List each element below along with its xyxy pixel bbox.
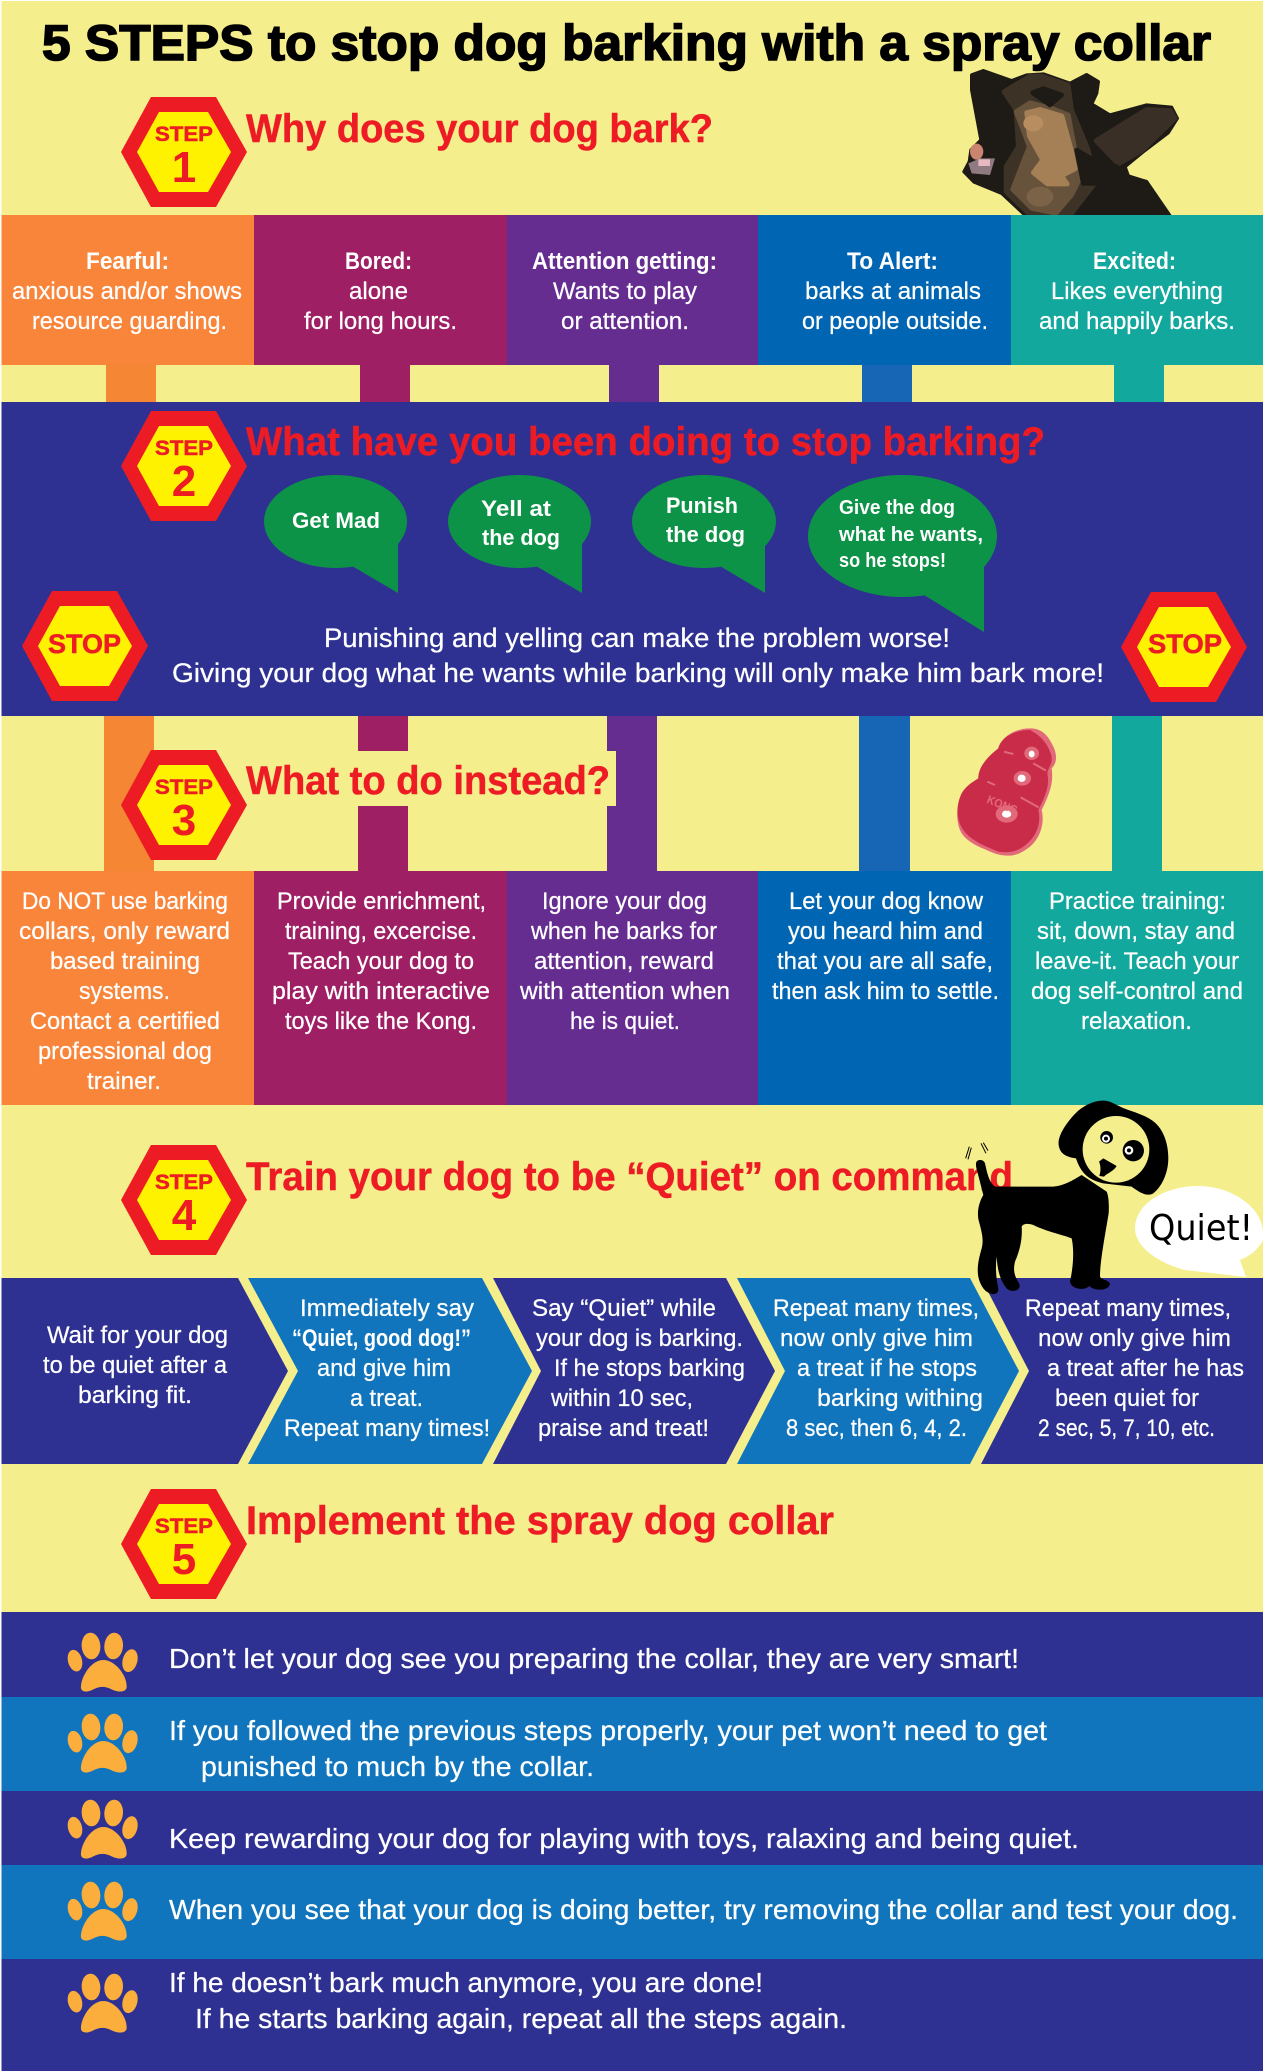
step 3 badge	[121, 750, 247, 860]
chevron 1: barking fit.	[78, 1382, 192, 1409]
speech bubble: get mad: Get Mad	[292, 508, 380, 533]
panel: attention getting	[507, 215, 758, 365]
step 4 badge: STEP	[155, 1171, 213, 1194]
title: 5 STEPS to stop dog barking with a spray collar	[42, 15, 1211, 71]
panel: do not use barking collars: Do NOT use barking	[22, 888, 228, 915]
stop sign left	[22, 591, 148, 701]
chevron 3: within 10 sec,	[550, 1385, 693, 1412]
panel: do not use barking collars: professional dog	[38, 1038, 212, 1065]
step 3 badge: STEP	[155, 776, 213, 799]
chevron 2: Immediately say	[300, 1295, 474, 1322]
panel: do not use barking collars: systems.	[79, 978, 170, 1005]
speech bubble: give the dog what he wants	[808, 475, 997, 632]
panel: bored	[254, 215, 507, 365]
stop sign left: STOP	[48, 629, 121, 659]
tip row 4: When you see that your dog is doing better, try removing the collar and test your dog.	[169, 1894, 1238, 1925]
panel: ignore your dog: attention, reward	[534, 948, 714, 975]
panel: bored: alone	[349, 278, 408, 305]
panel: excited: Excited:	[1093, 248, 1176, 275]
section: step 2 what have you been doing	[2, 402, 1263, 716]
panel: let your dog know: Let your dog know	[789, 888, 984, 915]
step 2 badge: 2	[172, 457, 196, 506]
chevron 5	[981, 1278, 1263, 1464]
step 1 badge: STEP	[155, 123, 213, 146]
speech bubble: yell at the dog: Yell at	[481, 496, 552, 521]
icon: cartoon dog	[966, 1101, 1168, 1294]
panel: fearful	[2, 215, 254, 365]
panel: provide enrichment: Provide enrichment,	[277, 888, 486, 915]
heading backing	[246, 751, 616, 806]
chevron 4: a treat if he stops	[797, 1355, 977, 1382]
panel: attention getting: or attention.	[561, 308, 689, 335]
section: what to do instead columns	[2, 871, 1263, 1105]
stop sign right	[1121, 592, 1247, 702]
step 2 heading: What have you been doing to stop barking?	[246, 420, 1045, 464]
tip row 1	[2, 1612, 1263, 1697]
chevron 5: a treat after he has	[1047, 1355, 1244, 1382]
step 4 badge	[121, 1145, 247, 1255]
step 1 heading: Why does your dog bark?	[246, 107, 713, 151]
panel: ignore your dog: he is quiet.	[570, 1008, 680, 1035]
panel: ignore your dog: when he barks for	[530, 918, 717, 945]
step 4 badge: 4	[172, 1191, 197, 1240]
section: step 3 connector stubs	[104, 716, 1162, 871]
panel: fearful: Fearful:	[86, 248, 169, 275]
chevron 4: now only give him	[780, 1325, 973, 1352]
panel: let your dog know: that you are all safe,	[777, 948, 993, 975]
step 3 heading: What to do instead?	[246, 759, 610, 803]
panel: practice training	[1011, 871, 1263, 1105]
chevron 3: Say “Quiet” while	[532, 1295, 716, 1322]
icon: kong toy: KONG	[985, 792, 1020, 817]
tip row 2	[2, 1697, 1263, 1791]
speech bubble: yell at the dog	[448, 475, 591, 593]
chevron 4: Repeat many times,	[773, 1295, 979, 1322]
panel: provide enrichment: play with interactive	[272, 978, 490, 1005]
panel: to alert: To Alert:	[847, 248, 938, 275]
chevron 2: Repeat many times!	[284, 1415, 490, 1442]
panel: provide enrichment: toys like the Kong.	[285, 1008, 477, 1035]
panel: do not use barking collars	[2, 871, 254, 1105]
panel: ignore your dog	[507, 871, 758, 1105]
chevron 3	[493, 1278, 775, 1464]
speech bubble: punish the dog: the dog	[666, 522, 745, 547]
step 4 heading: Train your dog to be “Quiet” on command	[246, 1155, 1013, 1199]
panel: ignore your dog: with attention when	[519, 978, 730, 1005]
panel: fearful: anxious and/or shows	[12, 278, 242, 305]
step 5 badge: STEP	[155, 1515, 213, 1538]
speech bubble: get mad	[264, 475, 407, 593]
panel: fearful: resource guarding.	[32, 308, 227, 335]
step 5 heading: Implement the spray dog collar	[246, 1499, 834, 1543]
stop sign right: STOP	[1148, 629, 1222, 659]
chevron 3: your dog is barking.	[536, 1325, 743, 1352]
panel: provide enrichment: Teach your dog to	[288, 948, 474, 975]
chevron 2: and give him	[317, 1355, 451, 1382]
panel: provide enrichment: training, excercise.	[285, 918, 477, 945]
panel: bored: for long hours.	[304, 308, 457, 335]
chevron 5: 2 sec, 5, 7, 10, etc.	[1038, 1415, 1215, 1442]
panel: practice training: relaxation.	[1081, 1008, 1192, 1035]
panel: ignore your dog: Ignore your dog	[542, 888, 707, 915]
panel: excited: Likes everything	[1051, 278, 1223, 305]
section: implementation tips	[2, 1612, 1263, 2071]
speech bubble: give the dog what he wants: what he wants,	[838, 524, 983, 546]
tip row 2: If you followed the previous steps properly, your pet won’t need to get	[169, 1715, 1047, 1746]
section: step 1 why does your dog bark	[121, 71, 1177, 217]
panel: let your dog know	[758, 871, 1011, 1105]
chevron 5: now only give him	[1038, 1325, 1231, 1352]
chevron 3: praise and treat!	[538, 1415, 709, 1442]
warning text: Giving your dog what he wants while barking will only make him bark more!	[172, 658, 1104, 688]
speech bubble: punish the dog: Punish	[666, 493, 738, 518]
chevron 2: “Quiet, good dog!”	[292, 1325, 471, 1352]
panel: do not use barking collars: Contact a certified	[30, 1008, 220, 1035]
panel: practice training: sit, down, stay and	[1037, 918, 1235, 945]
panel: to alert: barks at animals	[805, 278, 981, 305]
speech bubble: quiet: Quiet!	[1149, 1208, 1253, 1249]
panel: to alert	[758, 215, 1011, 365]
speech bubble: quiet	[1135, 1186, 1263, 1277]
section: quiet training process chevrons	[2, 1278, 1263, 1464]
tip row 3: Keep rewarding your dog for playing with toys, ralaxing and being quiet.	[169, 1823, 1079, 1854]
step 5 badge	[121, 1489, 247, 1599]
tip row 3	[2, 1791, 1263, 1865]
tip row 2: punished to much by the collar.	[201, 1751, 594, 1782]
speech bubble: give the dog what he wants: Give the dog	[839, 497, 955, 519]
chevron 4: 8 sec, then 6, 4, 2.	[786, 1415, 967, 1442]
panel: attention getting: Attention getting:	[532, 248, 717, 275]
chevron 2	[248, 1278, 532, 1464]
icon: kong toy	[957, 728, 1056, 856]
chevron 2: a treat.	[350, 1385, 423, 1412]
panel: let your dog know: you heard him and	[788, 918, 983, 945]
step 3 badge: 3	[172, 796, 196, 845]
chevron 4: barking withing	[817, 1385, 983, 1412]
tip row 5: If he starts barking again, repeat all the steps again.	[195, 2003, 847, 2034]
panel: practice training: dog self-control and	[1031, 978, 1243, 1005]
panel: practice training: leave-it. Teach your	[1035, 948, 1239, 975]
step 5 badge: 5	[172, 1535, 196, 1584]
chevron 1	[2, 1278, 288, 1464]
panel: to alert: or people outside.	[802, 308, 988, 335]
panel: attention getting: Wants to play	[553, 278, 697, 305]
chevron 1: Wait for your dog	[47, 1322, 228, 1349]
tip row 5: If he doesn’t bark much anymore, you are done!	[169, 1967, 763, 1998]
chevron 1: to be quiet after a	[43, 1352, 228, 1379]
panel: excited: and happily barks.	[1039, 308, 1235, 335]
warning text: Punishing and yelling can make the problem worse!	[324, 623, 950, 653]
step 2 badge	[121, 411, 247, 521]
image: barking dog photo	[964, 71, 1177, 217]
panel: bored: Bored:	[345, 248, 412, 275]
panel: do not use barking collars: collars, only reward	[19, 918, 230, 945]
panel: practice training: Practice training:	[1049, 888, 1226, 915]
tip row 5	[2, 1959, 1263, 2071]
panel: excited	[1011, 215, 1263, 365]
step 2 badge: STEP	[155, 437, 213, 460]
connector stubs	[106, 365, 1164, 402]
step 1 badge: 1	[172, 143, 196, 192]
tip row 4	[2, 1865, 1263, 1959]
chevron 5: Repeat many times,	[1025, 1295, 1231, 1322]
panel: let your dog know: then ask him to settle.	[772, 978, 999, 1005]
panel: do not use barking collars: based training	[50, 948, 200, 975]
speech bubble: punish the dog	[632, 475, 776, 593]
chevron 5: been quiet for	[1055, 1385, 1199, 1412]
speech bubble: yell at the dog: the dog	[482, 525, 560, 550]
speech bubble: give the dog what he wants: so he stops!	[839, 550, 946, 572]
chevron 3: If he stops barking	[554, 1355, 745, 1382]
tip row 1: Don’t let your dog see you preparing the collar, they are very smart!	[169, 1643, 1019, 1674]
step 1 badge	[121, 97, 247, 207]
section: reasons columns and connectors	[2, 215, 1263, 402]
chevron 4	[737, 1278, 1019, 1464]
panel: provide enrichment	[254, 871, 507, 1105]
warning text	[172, 623, 1104, 688]
panel: do not use barking collars: trainer.	[87, 1068, 161, 1095]
